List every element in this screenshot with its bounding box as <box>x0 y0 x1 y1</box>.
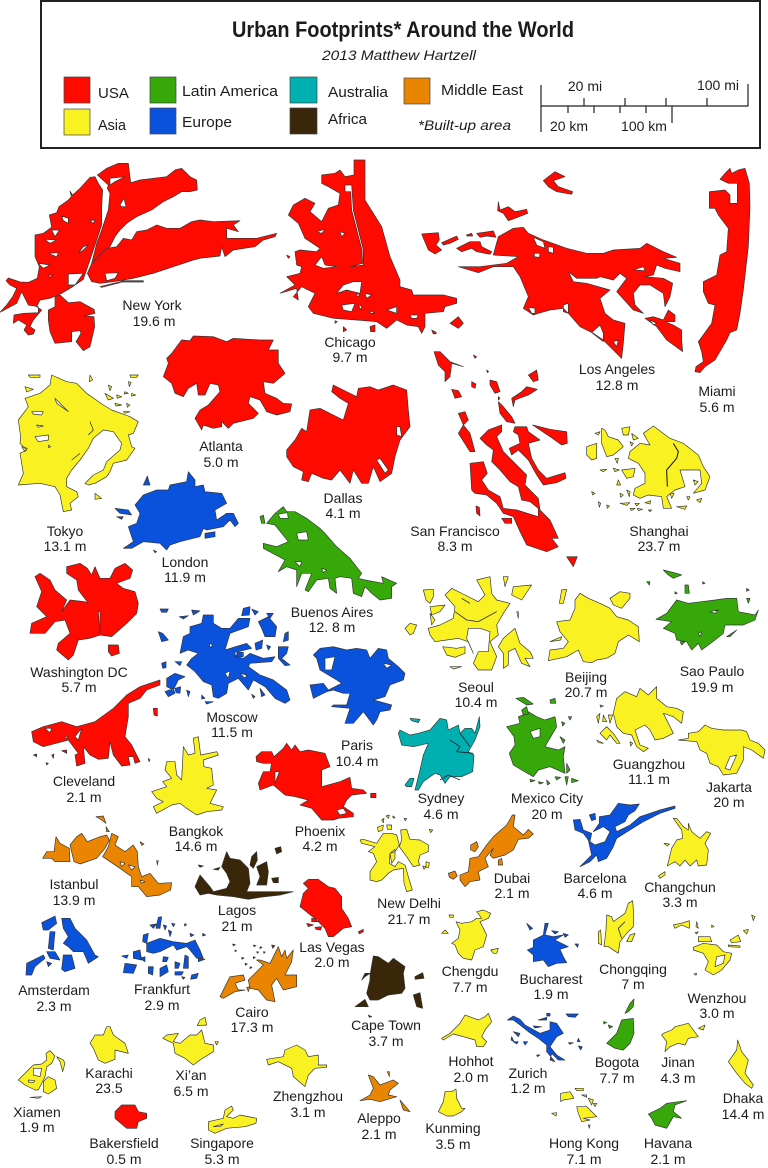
city: Zurich <box>507 1013 582 1096</box>
city: Cairo: 17.3 m <box>231 1019 273 1035</box>
city: Sao Paulo <box>647 570 758 695</box>
city: Las Vegas: 2.0 m <box>314 954 350 970</box>
city: San Francisco: San Francisco <box>410 523 500 539</box>
city: Xiamen: Xiamen <box>13 1104 61 1120</box>
city: Zhengzhou <box>267 1045 343 1120</box>
city: Sao Paulo: 19.9 m <box>691 679 733 695</box>
city: Singapore <box>190 1106 257 1167</box>
city: Bucharest: Bucharest <box>519 971 583 987</box>
city: Washington DC: 5.7 m <box>61 679 97 695</box>
city: Amsterdam: 2.3 m <box>36 998 72 1014</box>
city: Hong Kong: Hong Kong <box>549 1135 619 1151</box>
city: Hong Kong <box>549 1088 619 1167</box>
city: Barcelona: Barcelona <box>563 870 627 886</box>
city: Barcelona: 4.6 m <box>577 885 613 901</box>
city: Dhaka: 14.4 m <box>722 1106 764 1122</box>
city: Guangzhou: Guangzhou <box>613 756 685 772</box>
city: Zhengzhou: 3.1 m <box>290 1104 326 1120</box>
city: London <box>115 472 238 585</box>
city: Dallas <box>287 385 410 521</box>
scale bar: 20 km <box>550 118 588 134</box>
city: Dubai: 2.1 m <box>494 885 530 901</box>
city: Kunming: Kunming <box>425 1120 481 1136</box>
city: Singapore: Singapore <box>190 1135 254 1151</box>
city: Beijing <box>548 589 639 700</box>
city: Jakarta: 20 m <box>713 794 745 810</box>
header panel <box>41 1 760 148</box>
city: Cape Town <box>351 956 424 1049</box>
city: Jinan: 4.3 m <box>660 1070 696 1086</box>
city: Dhaka <box>722 1040 764 1122</box>
city: London: 11.9 m <box>164 569 206 585</box>
city: Miami: Miami <box>698 383 736 399</box>
city: Beijing: Beijing <box>565 669 607 685</box>
city: Guangzhou <box>597 687 685 787</box>
city: Wenzhou: Wenzhou <box>688 990 746 1006</box>
city: Sydney <box>398 717 480 822</box>
city: Bucharest: 1.9 m <box>533 986 569 1002</box>
city: Chengdu: 7.7 m <box>452 979 488 995</box>
legend: Latin America <box>182 83 279 100</box>
city: Aleppo: 2.1 m <box>361 1126 397 1142</box>
city: Lagos <box>195 847 293 934</box>
city: Dhaka: Dhaka <box>723 1090 763 1106</box>
city: Karachi: Karachi <box>85 1065 133 1081</box>
city: Kunming <box>425 1089 481 1152</box>
city: New York: New York <box>122 297 183 313</box>
city: Chongqing: Chongqing <box>599 961 667 977</box>
scale bar <box>541 77 748 134</box>
city: New Delhi: New Delhi <box>377 895 441 911</box>
city: Wenzhou <box>673 915 755 1021</box>
legend: Asia <box>98 117 127 134</box>
legend: Europe <box>182 114 232 131</box>
city: Cleveland <box>32 680 160 805</box>
city: Dallas: 4.1 m <box>325 505 361 521</box>
city: Washington DC <box>30 563 138 695</box>
city: Xi'an: Xi’an <box>175 1067 207 1083</box>
city: Cape Town: Cape Town <box>351 1017 421 1033</box>
city: Atlanta: Atlanta <box>199 438 243 454</box>
city: Moscow: 11.5 m <box>211 724 253 740</box>
city: Mexico City: Mexico City <box>511 790 583 806</box>
city: Las Vegas <box>299 879 365 970</box>
city: San Francisco <box>410 352 577 567</box>
city: Sydney: 4.6 m <box>423 806 459 822</box>
city: San Francisco: 8.3 m <box>437 538 473 554</box>
city: Bakersfield: Bakersfield <box>89 1135 159 1151</box>
city: Bogota: Bogota <box>595 1054 639 1070</box>
city: Phoenix: Phoenix <box>295 823 345 839</box>
city: Karachi <box>85 1027 133 1096</box>
city: Jakarta <box>678 725 765 810</box>
city: Shanghai: 23.7 m <box>638 538 680 554</box>
city: Tokyo <box>18 375 138 554</box>
city: Cairo <box>220 944 297 1035</box>
legend: *Built-up area <box>418 117 511 133</box>
city: Amsterdam: Amsterdam <box>18 982 90 998</box>
city: Moscow: Moscow <box>206 709 259 725</box>
city: Jinan <box>660 1023 705 1086</box>
scale bar: 20 mi <box>568 78 602 94</box>
city: Mexico City: 20 m <box>531 806 563 822</box>
city: Bakersfield: 0.5 m <box>106 1151 142 1167</box>
city: Frankfurt: Frankfurt <box>134 981 190 997</box>
city: Havana: 2.1 m <box>650 1151 686 1167</box>
city: New York: 19.6 m <box>133 313 175 329</box>
city: Shanghai <box>587 426 710 554</box>
city: Las Vegas: Las Vegas <box>299 939 365 955</box>
city: Seoul: 10.4 m <box>455 694 497 710</box>
city: Hohhot: Hohhot <box>448 1053 494 1069</box>
city: Paris <box>310 647 405 769</box>
city: Chicago: 9.7 m <box>332 349 368 365</box>
city: London: London <box>162 554 208 570</box>
city: Los Angeles: 12.8 m <box>596 377 638 393</box>
city: Bangkok: 14.6 m <box>175 838 217 854</box>
city: Cleveland: 2.1 m <box>66 789 102 805</box>
city: Sao Paulo: Sao Paulo <box>680 663 745 679</box>
city: Buenos Aires <box>260 507 397 635</box>
city: Wenzhou: 3.0 m <box>699 1005 735 1021</box>
city: Mexico City <box>507 697 583 822</box>
city: Bogota: 7.7 m <box>599 1070 635 1086</box>
city: Chongqing <box>598 901 667 992</box>
city: Aleppo <box>357 1072 410 1142</box>
city: Los Angeles <box>422 172 683 393</box>
city: Istanbul <box>43 816 172 908</box>
city: Dallas: Dallas <box>324 490 362 506</box>
city: Buenos Aires: Buenos Aires <box>291 604 373 620</box>
city: Beijing: 20.7 m <box>565 684 607 700</box>
city: Washington DC: Washington DC <box>30 664 128 680</box>
city: Chongqing: 7 m <box>621 976 645 992</box>
city: Lagos: Lagos <box>218 902 256 918</box>
city: Kunming: 3.5 m <box>435 1136 471 1152</box>
city: Seoul: Seoul <box>458 679 494 695</box>
city: Chengdu: Chengdu <box>442 963 498 979</box>
city: Zhengzhou: Zhengzhou <box>273 1088 343 1104</box>
city: Moscow <box>158 607 290 740</box>
legend: Middle East <box>441 82 524 99</box>
city: Shanghai: Shanghai <box>629 523 689 539</box>
city: Havana: Havana <box>644 1135 692 1151</box>
city: Tokyo: 13.1 m <box>44 538 86 554</box>
legend: Africa <box>328 111 368 128</box>
city: Jakarta: Jakarta <box>706 779 752 795</box>
city: Singapore: 5.3 m <box>204 1151 240 1167</box>
city: Bucharest <box>519 923 583 1002</box>
city: Barcelona <box>563 803 675 901</box>
city: Atlanta: 5.0 m <box>203 454 239 470</box>
city: Atlanta <box>163 336 292 470</box>
city: Changchun: Changchun <box>644 879 716 895</box>
title: Urban Footprints* Around the World <box>232 17 574 42</box>
city: Zurich: 1.2 m <box>510 1080 546 1096</box>
city: Chicago: Chicago <box>324 334 376 350</box>
city: Chicago <box>280 160 463 365</box>
city: Guangzhou: 11.1 m <box>628 771 670 787</box>
city: Istanbul: 13.9 m <box>53 892 95 908</box>
city: Xi'an <box>163 1017 218 1099</box>
city: Xiamen: 1.9 m <box>19 1119 55 1135</box>
city: Changchun: 3.3 m <box>662 894 698 910</box>
city: Havana <box>644 1101 692 1167</box>
city: Hohhot <box>442 1013 494 1085</box>
city: Hong Kong: 7.1 m <box>566 1151 602 1167</box>
city: Cairo: Cairo <box>235 1004 269 1020</box>
city: Karachi: 23.5 <box>95 1080 123 1096</box>
city: New York <box>0 163 277 351</box>
city: New Delhi <box>360 815 441 927</box>
city: Hohhot: 2.0 m <box>453 1069 489 1085</box>
city: Chengdu <box>442 910 498 995</box>
city: Phoenix <box>256 743 376 854</box>
city: Dubai: Dubai <box>494 870 530 886</box>
city: Sydney: Sydney <box>418 790 464 806</box>
legend <box>64 77 524 135</box>
city: Amsterdam <box>18 916 98 1014</box>
city: Miami: 5.6 m <box>699 399 735 415</box>
city: Changchun <box>644 818 716 910</box>
city: Istanbul: Istanbul <box>49 876 99 892</box>
city: Phoenix: 4.2 m <box>302 838 338 854</box>
city: Tokyo: Tokyo <box>47 523 83 539</box>
city: Bogota <box>595 999 639 1086</box>
city: Aleppo: Aleppo <box>357 1110 401 1126</box>
city: Zurich: Zurich <box>509 1065 547 1081</box>
city: Seoul <box>405 577 533 710</box>
city: Cleveland: Cleveland <box>53 773 115 789</box>
city: Cape Town: 3.7 m <box>368 1033 404 1049</box>
subtitle: 2013 Matthew Hartzell <box>321 47 477 63</box>
legend: USA <box>98 85 129 102</box>
city: Bakersfield <box>89 1105 159 1167</box>
city: Buenos Aires: 12. 8 m <box>309 619 355 635</box>
scale bar: 100 mi <box>697 77 739 93</box>
city: Frankfurt <box>122 917 206 1013</box>
city: Xiamen <box>13 1051 65 1135</box>
scale bar: 100 km <box>621 118 667 134</box>
city: Lagos: 21 m <box>221 918 253 934</box>
city: Los Angeles: Los Angeles <box>579 361 655 377</box>
city: Paris: 10.4 m <box>336 753 378 769</box>
city: Miami <box>695 168 750 415</box>
city: Dubai <box>448 815 533 901</box>
city: Frankfurt: 2.9 m <box>144 997 180 1013</box>
city: Paris: Paris <box>341 737 373 753</box>
city: Bangkok: Bangkok <box>169 823 224 839</box>
city: Jinan: Jinan <box>661 1054 695 1070</box>
city: New Delhi: 21.7 m <box>388 911 430 927</box>
legend: Australia <box>328 84 389 101</box>
city: Xi'an: 6.5 m <box>173 1083 209 1099</box>
city: Bangkok <box>152 737 224 854</box>
